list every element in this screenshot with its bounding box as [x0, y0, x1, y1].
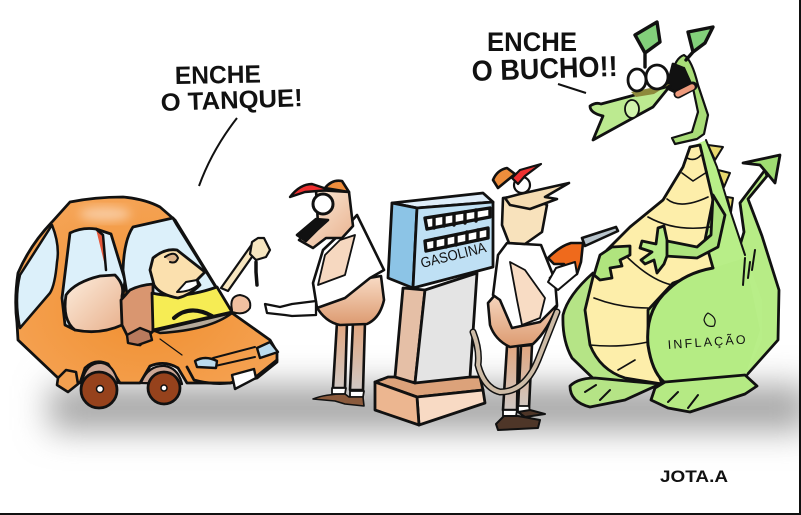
shirt — [493, 243, 557, 328]
attendant's fist — [231, 295, 250, 313]
pump head side — [388, 203, 417, 288]
petrol pump — [375, 193, 493, 425]
left body — [563, 273, 640, 385]
fuel nozzle — [548, 227, 618, 290]
right headlight — [257, 342, 278, 358]
mouth — [297, 219, 328, 241]
shirt panel — [510, 262, 545, 325]
cap visor — [512, 164, 541, 184]
bumper — [187, 360, 277, 384]
display row two — [425, 228, 488, 251]
thigh — [648, 258, 760, 386]
front window — [123, 218, 232, 331]
socks — [332, 388, 364, 397]
yellow spikes — [708, 145, 733, 212]
pump head top — [392, 193, 493, 208]
socks — [503, 406, 530, 416]
thigh line — [648, 268, 713, 386]
brow shading — [631, 84, 670, 97]
driver shirt — [152, 287, 232, 330]
tail — [700, 170, 779, 377]
reaching arm — [265, 301, 316, 316]
cap visor — [290, 184, 330, 197]
glasses — [313, 194, 333, 214]
driver hand — [250, 238, 270, 260]
side window — [62, 228, 125, 330]
speech: enche o tanque — [160, 61, 303, 186]
right foot — [651, 375, 757, 412]
navel — [704, 313, 715, 326]
rear wheel — [81, 372, 117, 408]
wheel arch front — [141, 366, 182, 384]
pump head front — [413, 202, 493, 288]
tail arrow — [743, 155, 780, 183]
belly — [585, 145, 713, 384]
front hub — [161, 385, 167, 391]
right ear — [686, 27, 713, 60]
car — [16, 197, 278, 408]
display digits — [434, 210, 478, 249]
snout eye — [625, 100, 639, 118]
hood crease — [160, 339, 182, 355]
pump base side — [375, 382, 419, 425]
front wheel — [148, 372, 180, 404]
neck band — [672, 55, 708, 144]
pants — [488, 290, 557, 347]
driver mouth — [177, 280, 198, 292]
attendant two — [488, 164, 569, 430]
speech: enche o bucho: ENCHE — [487, 27, 577, 57]
keys — [256, 262, 257, 285]
legs — [503, 345, 532, 410]
front seat — [121, 284, 153, 345]
driver glasses — [165, 254, 178, 262]
window pillar — [96, 229, 106, 270]
arm — [665, 195, 725, 258]
cap crown — [325, 181, 349, 192]
door handle — [127, 328, 152, 345]
pump column front — [415, 273, 477, 383]
speech: enche o tanque: O TANQUE! — [160, 84, 303, 117]
left headlight — [195, 358, 217, 368]
shoes — [313, 394, 364, 406]
gripping hand — [548, 262, 577, 290]
dragon — [563, 22, 780, 412]
label inflacao: INFLAÇÃO — [667, 333, 746, 352]
ground shadow — [50, 386, 801, 430]
wheel arch rear — [82, 363, 118, 383]
left hand — [594, 246, 630, 280]
left eye — [628, 69, 646, 91]
speech: enche o bucho: O BUCHO!! — [471, 51, 618, 88]
toes — [585, 385, 698, 408]
car body — [16, 197, 277, 383]
grille — [213, 347, 255, 366]
speech: enche o tanque: ENCHE — [175, 61, 261, 90]
steering wheel — [174, 310, 212, 318]
open mouth — [667, 64, 692, 93]
attendant one — [265, 181, 384, 406]
left foot — [570, 378, 660, 407]
right eye — [646, 65, 668, 89]
tongue fill — [678, 87, 692, 94]
pump base front — [417, 390, 485, 425]
head — [502, 195, 547, 244]
rear window — [17, 225, 58, 328]
licence plate — [232, 369, 256, 389]
roof highlight — [79, 207, 131, 221]
back — [640, 140, 762, 382]
belly stripes — [590, 155, 710, 370]
driver arm — [221, 240, 261, 291]
driver head — [150, 250, 205, 298]
label gasolina: GASOLINA — [419, 240, 488, 272]
pants — [316, 276, 384, 325]
rear seat — [65, 275, 123, 332]
rear bump — [57, 370, 78, 392]
legs — [333, 322, 365, 390]
handle — [548, 243, 583, 285]
head — [299, 190, 353, 248]
left ear — [635, 22, 660, 67]
nose — [505, 183, 569, 209]
snout — [590, 86, 670, 140]
pump column side — [395, 288, 425, 383]
rear hub — [96, 386, 104, 392]
cap crown — [493, 168, 515, 188]
back line — [706, 140, 745, 255]
spout — [582, 227, 618, 246]
display row one — [425, 208, 490, 229]
dashboard — [155, 313, 232, 333]
shoes — [496, 410, 545, 430]
tail tuft — [743, 250, 755, 285]
right hand — [640, 226, 667, 273]
shirt strap — [318, 235, 355, 285]
hose — [473, 312, 557, 392]
eye — [514, 177, 530, 193]
speech: enche o bucho — [471, 27, 618, 93]
shirt — [313, 215, 384, 308]
pump base top — [375, 377, 483, 397]
signature: JOTA.A — [660, 467, 728, 486]
tongue — [678, 86, 693, 94]
